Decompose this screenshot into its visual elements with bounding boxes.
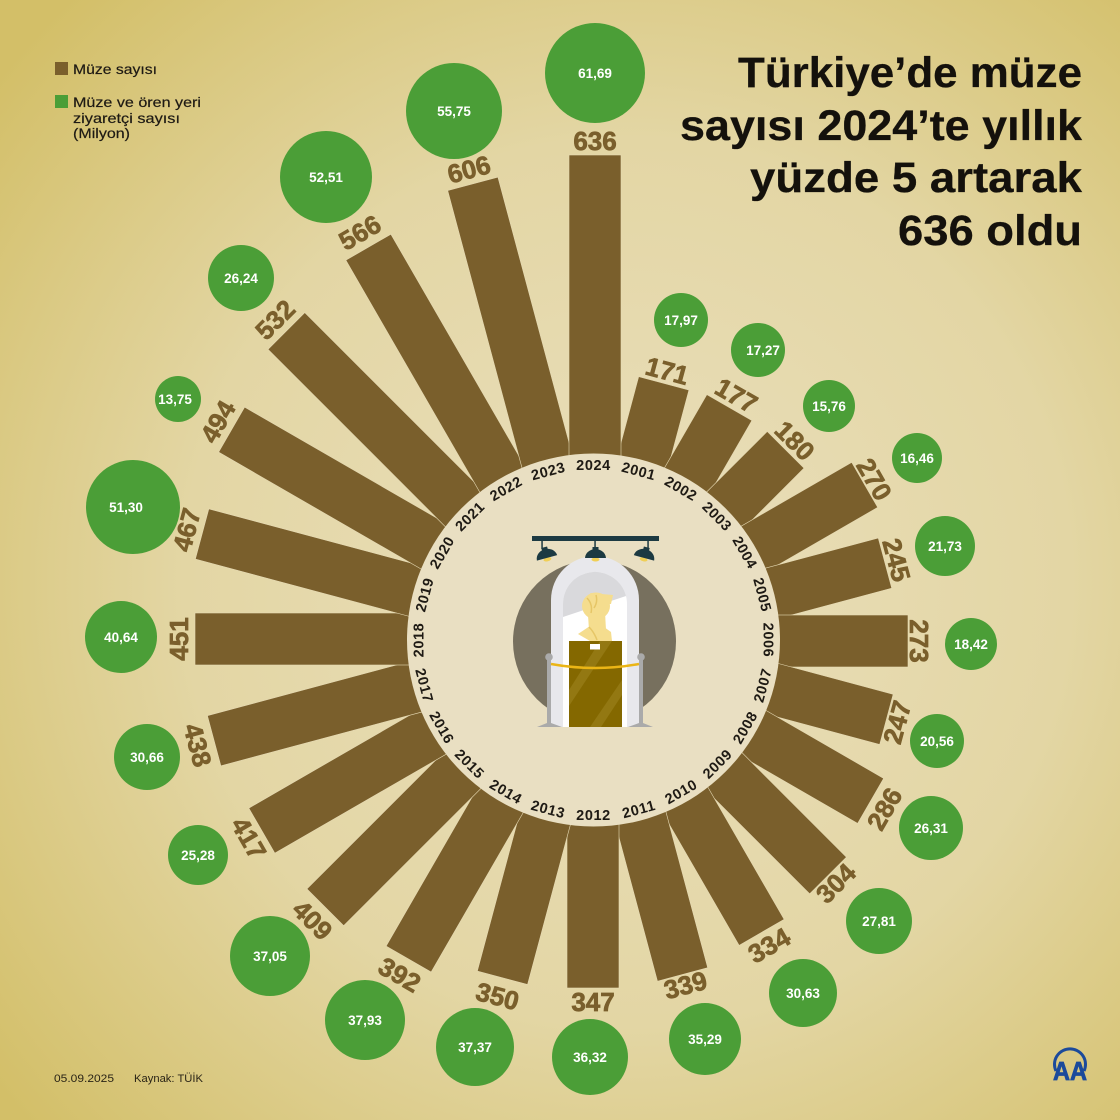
bubble: 2024: 61,69 [578,66,612,81]
bubble: 2010 [769,959,837,1027]
visitor bubbles [85,23,997,1095]
bubble: 2019: 51,30 [109,500,143,515]
bubble: 2011 [669,1003,741,1075]
bar: 2007: 247 [877,697,917,747]
bar: 2011 [615,807,714,1006]
year labels ring [411,458,776,824]
bar: 2023: 606 [444,149,494,190]
bar: 2015: 409 [287,894,338,946]
bubble: 2018: 40,64 [104,630,138,645]
bar: 2017 [176,661,427,774]
year: 2023: 2023 [530,460,567,484]
bubble: 2005: 21,73 [928,539,962,554]
year: 2009: 2009 [700,747,736,782]
bubble: 2009: 27,81 [862,914,896,929]
year: 2016: 2016 [425,709,457,747]
title: 636 oldu [898,207,1082,255]
bubble: 2016: 25,28 [181,848,215,863]
bar: 2006: 273 [904,619,934,663]
bubble: 2022: 52,51 [309,170,343,185]
bubble: 2006 [945,618,997,670]
bubble: 2006: 18,42 [954,637,988,652]
bubble: 2002: 17,27 [746,343,780,358]
bubble: 2011: 35,29 [688,1032,722,1047]
year: 2006: 2006 [759,623,775,657]
ceiling lights [532,536,659,564]
bubble: 2007 [910,714,964,768]
bar: 2014: 392 [373,951,426,999]
bubble: 2001: 17,97 [664,313,698,328]
bubble: 2007: 20,56 [920,734,954,749]
arch niche [551,556,639,727]
title: sayısı 2024’te yıllık [680,102,1082,150]
bar: 2020 [192,392,452,572]
bubble: 2015: 37,05 [253,949,287,964]
bar: 2011: 339 [661,965,710,1005]
year: 2008: 2008 [730,709,762,747]
year: 2014: 2014 [486,777,524,808]
year: 2020: 2020 [427,534,458,572]
year: 2013: 2013 [529,798,567,822]
year: 2022: 2022 [488,474,526,505]
year: 2018: 2018 [412,623,428,657]
bar: 2004: 270 [850,453,898,506]
bubble: 2017 [114,724,180,790]
bar: 2018 [164,613,414,665]
title: yüzde 5 artarak [750,154,1082,202]
bubble: 2008 [899,796,963,860]
bar: 2024 [569,126,621,460]
bar: 2008 [736,708,911,839]
bubble: 2009 [846,888,912,954]
bar: 2001 [616,350,696,473]
bubble: 2003 [803,380,855,432]
year: 2015: 2015 [451,747,487,782]
logo: AA: AA [1053,1056,1087,1086]
pedestal [569,641,622,727]
footer: date and source: Kaynak: TÜİK [134,1072,204,1085]
inner circle [407,454,780,826]
year: 2004: 2004 [729,534,760,572]
bubble: 2013 [436,1008,514,1086]
bar: 2003: 180 [769,415,821,467]
bubble: 2020: 13,75 [158,392,192,407]
bar: 2014 [370,782,526,1001]
bar: 2024: 636 [573,126,617,156]
bar: 2002 [662,370,766,498]
year: 2002: 2002 [661,474,699,505]
year: 2010: 2010 [663,777,701,808]
bubble: 2010: 30,63 [786,986,820,1001]
bubble: 2017: 30,66 [130,750,164,765]
bar: 2018: 451 [164,617,194,661]
bubble: 2013: 37,37 [458,1040,492,1055]
bubble: 2005 [915,516,975,576]
legend [55,61,201,141]
legend item: visitor count: Müze ve ören yeri [73,94,201,110]
bar: 2021 [246,291,486,530]
year: 2021: 2021 [453,499,488,535]
bubble: 2004: 16,46 [900,451,934,466]
bar: 2006 [774,615,934,667]
bubble: 2020 [155,376,201,422]
year: 2019: 2019 [413,576,438,614]
legend item: museum count: Müze sayısı [73,61,157,77]
year: 2012: 2012 [576,808,611,824]
bubble: 2004 [892,433,942,483]
footer: date and source [54,1072,204,1085]
bar: 2017: 438 [178,720,218,770]
bubble: 2021: 26,24 [224,271,258,286]
bar: 2005 [761,531,918,619]
year: 2024: 2024 [576,458,611,474]
bar: 2016: 417 [225,812,273,864]
year: 2003: 2003 [699,499,734,535]
bubble: 2023: 55,75 [437,104,471,119]
bar: 2005: 245 [876,535,917,585]
year: 2017: 2017 [411,667,436,704]
legend item: visitor count: ziyaretçi sayısı [73,110,180,126]
bar: 2021: 532 [249,294,301,346]
bar: 2015 [284,748,484,949]
bubble: 2016 [168,825,228,885]
legend item: visitor count [55,94,201,141]
radial bar chart [164,126,934,1017]
bubble: 2019 [86,460,180,554]
bar: 2001: 171 [642,351,692,391]
bar: 2010 [661,783,799,971]
dark backdrop circle [513,560,676,723]
bar: 2023 [440,148,573,473]
footer: date and source: 05.09.2025 [54,1073,114,1085]
bubble: 2023 [406,63,502,159]
bubble: 2008: 26,31 [914,821,948,836]
bubble: 2021 [208,245,274,311]
bar: 2009: 304 [810,857,862,909]
bubble: 2014: 37,93 [348,1013,382,1028]
bubble: 2003: 15,76 [812,399,846,414]
bubble: 2018 [85,601,157,673]
bubble: 2024 [545,23,645,123]
bar: 2022: 566 [334,209,386,256]
museum illustration [513,536,676,727]
bubble: 2022 [280,131,372,223]
bar: 2003 [704,412,824,532]
bar: 2008: 286 [861,783,908,835]
bubble: 2012: 36,32 [573,1050,607,1065]
year: 2011: 2011 [621,798,657,822]
bar: 2019: 467 [167,505,207,555]
year: 2005: 2005 [749,576,774,614]
bar: 2007 [761,662,918,751]
bar: 2012: 347 [571,987,615,1017]
year: 2001: 2001 [620,460,657,484]
bubble: 2015 [230,916,310,996]
bubble: 2002 [731,323,785,377]
bubble: 2014 [325,980,405,1060]
bar: 2016 [223,707,451,868]
bar: 2004 [737,449,900,573]
bar: 2013: 350 [473,976,522,1016]
bar: 2010: 334 [743,921,796,969]
legend item: visitor count: (Milyon) [73,125,130,141]
stanchion posts and rope [537,653,653,727]
title [680,49,1082,255]
bar: 2002: 177 [710,372,763,419]
bar: 2022 [330,207,527,497]
title: Türkiye’de müze [738,49,1082,97]
bubble: 2012 [552,1019,628,1095]
year: 2007: 2007 [751,667,776,704]
bar: 2020: 494 [194,395,242,448]
bar: 2013 [469,807,572,1017]
bar: 2009 [702,750,865,912]
bust statue [578,592,613,641]
bubble: 2001 [654,293,708,347]
bar: 2012 [567,820,619,1017]
bar: 2019 [166,501,427,618]
